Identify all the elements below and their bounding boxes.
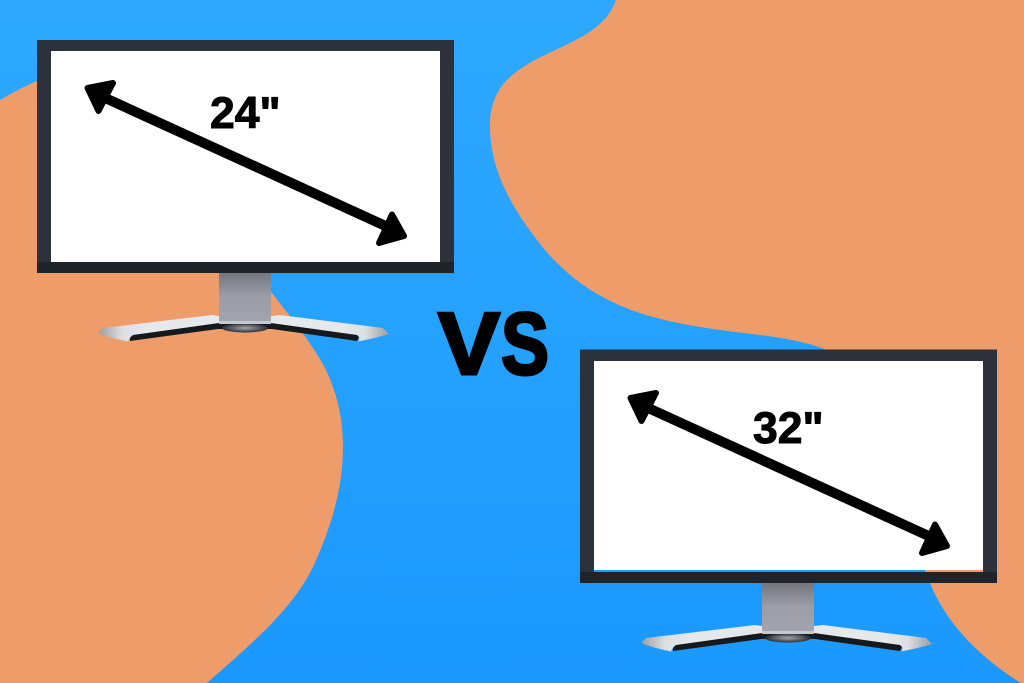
screen bottom strip bbox=[594, 570, 983, 572]
monitor stand bbox=[98, 273, 389, 342]
VS heading: S bbox=[501, 294, 549, 393]
blob: left orange bbox=[0, 78, 343, 683]
double-headed diagonal arrow bbox=[630, 393, 947, 553]
blob: bottom right orange bbox=[820, 350, 1024, 683]
monitor bezel bbox=[37, 40, 454, 273]
size label: 24" bbox=[210, 89, 281, 138]
screen bbox=[51, 51, 440, 262]
double-headed diagonal arrow bbox=[88, 83, 404, 243]
monitor: 24 inch bbox=[37, 40, 454, 342]
size label: 32" bbox=[753, 404, 824, 453]
VS heading: V bbox=[438, 294, 500, 393]
monitor: 32 inch bbox=[580, 350, 997, 652]
blob: top right orange bbox=[490, 0, 1024, 350]
monitor bezel bbox=[580, 350, 997, 583]
screen bbox=[594, 361, 983, 570]
monitor stand bbox=[641, 583, 932, 652]
